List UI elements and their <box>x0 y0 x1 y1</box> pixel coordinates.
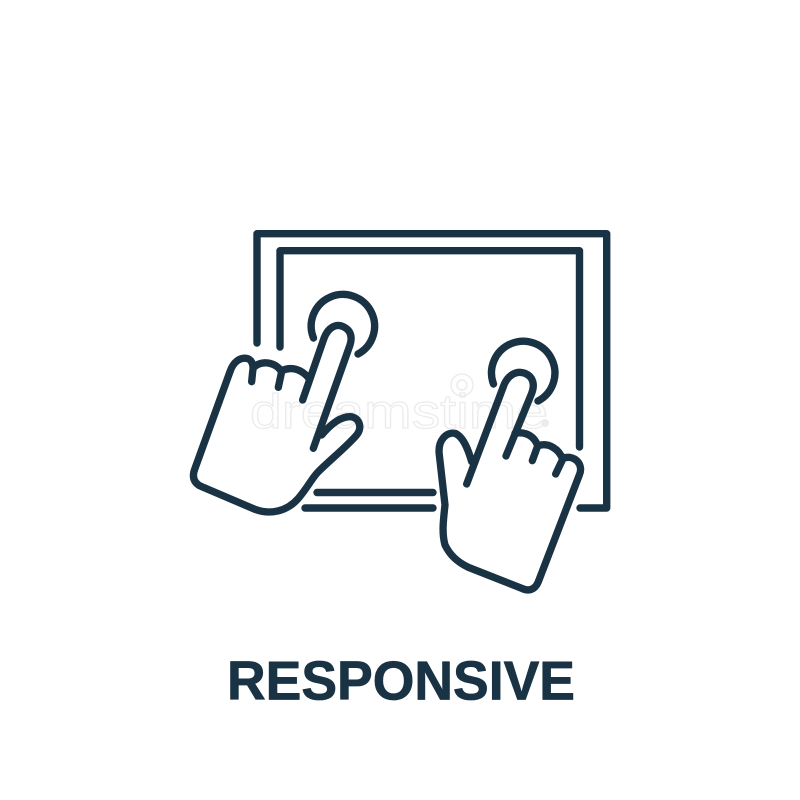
tablet inner frame <box>280 251 580 492</box>
icon: right hand <box>439 372 581 590</box>
icon: responsive touch screen <box>193 234 607 590</box>
watermark <box>250 374 549 439</box>
watermark: dreamstime <box>250 386 548 439</box>
icon: left hand <box>193 325 360 512</box>
title: RESPONSIVE <box>227 650 575 712</box>
touch ring right <box>492 341 555 401</box>
touch ring left <box>311 294 375 354</box>
tablet outer frame <box>257 234 607 508</box>
